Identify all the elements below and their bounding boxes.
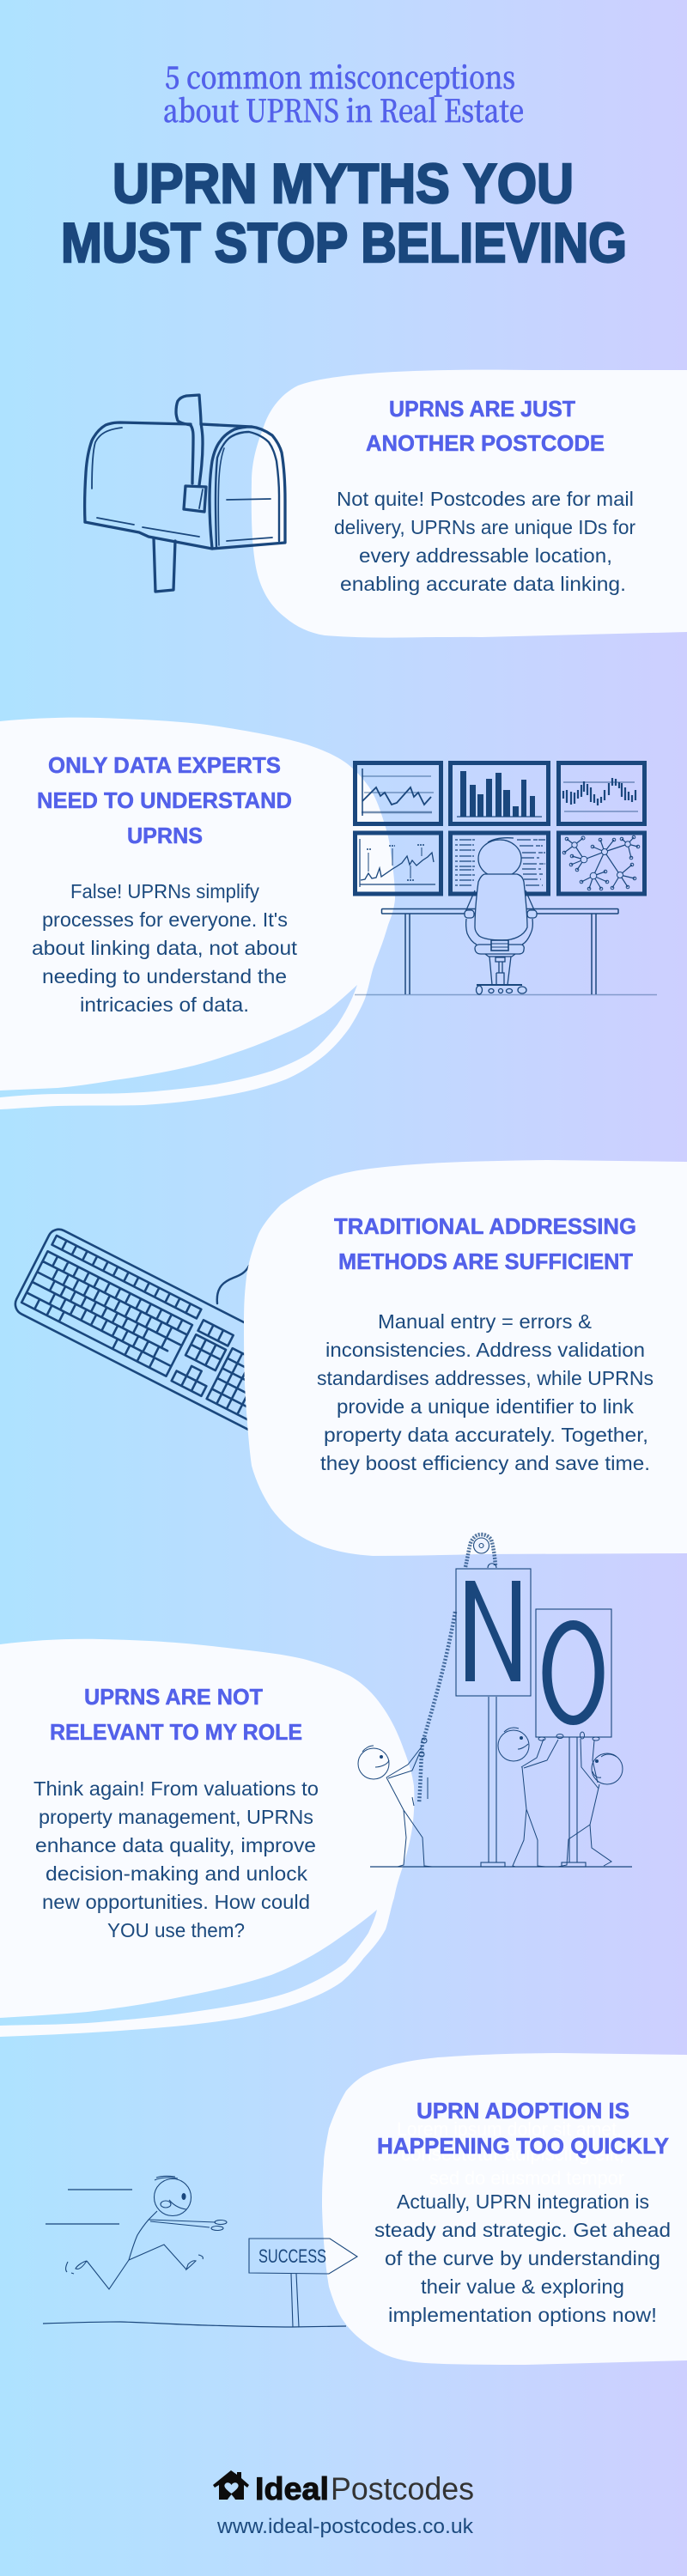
- chart: stock line monitor: [360, 839, 435, 887]
- text: myth 1 body: every addressable location,: [359, 544, 612, 567]
- icon: mailbox: [85, 395, 285, 592]
- text: myth 2 heading: NEED TO UNDERSTAND: [37, 787, 292, 813]
- text: myth 5 heading: HAPPENING TOO QUICKLY: [377, 2133, 669, 2159]
- keyboard cable: [217, 1266, 249, 1303]
- panel: myth 1 blob: [252, 370, 687, 638]
- faint leftover text behind myth 5: sed do eiusmod tempor: [429, 2167, 624, 2189]
- text: myth 5 body: [374, 2190, 671, 2326]
- text: myth 2 body: processes for everyone. It's: [42, 908, 288, 931]
- panel: myth 2 blob with tail: [0, 718, 395, 1109]
- illustration: running stick figure: [46, 2176, 227, 2289]
- ground line: [355, 994, 657, 996]
- text: myth 3 body: inconsistencies. Address validation: [325, 1339, 645, 1361]
- person in chair: [465, 838, 537, 994]
- ground line: [370, 1866, 632, 1868]
- text: myth 3 body: standardises addresses, while UPRNs: [317, 1367, 654, 1389]
- text: myth 1 body: Not quite! Postcodes are for mail: [337, 488, 634, 510]
- illustration: stick figures raising NO signs: [358, 1534, 632, 1867]
- logo: Ideal Postcodes: Ideal: [255, 2471, 329, 2506]
- text: myth 3 body: property data accurately. Together,: [324, 1424, 648, 1446]
- panel: myth 3 blob: [244, 1160, 687, 1556]
- monitor frames: [356, 762, 644, 894]
- logo: Ideal Postcodes: [213, 2470, 474, 2506]
- text: myth 2 body: about linking data, not about: [32, 937, 298, 959]
- stick figure lifting O right: [558, 1732, 623, 1867]
- text: myth 5 body: of the curve by understanding: [385, 2247, 660, 2269]
- text: myth 4 body: YOU use them?: [107, 1919, 245, 1941]
- text: myth 4 body: Think again! From valuations to: [33, 1777, 319, 1800]
- icon: house with heart: [213, 2470, 249, 2500]
- chart: line chart monitor: [362, 769, 434, 816]
- desk: [381, 908, 618, 994]
- text: myth 3 body: [317, 1310, 654, 1474]
- subtitle: 5 common misconceptions: [165, 54, 515, 98]
- faint leftover text behind myth 5: [397, 2118, 624, 2189]
- text: myth 1 body: delivery, UPRNs are unique IDs for: [334, 516, 635, 538]
- text: myth 1 heading: [366, 396, 605, 456]
- text: myth 5 body: Actually, UPRN integration is: [397, 2190, 649, 2213]
- signpost: success: SUCCESS: [258, 2245, 326, 2267]
- subtitle: about UPRNS in Real Estate: [163, 88, 524, 131]
- text: myth 2 body: [32, 880, 298, 1016]
- text: myth 1 heading: UPRNS ARE JUST: [389, 396, 575, 422]
- text: myth 3 heading: METHODS ARE SUFFICIENT: [338, 1249, 633, 1274]
- text: myth 4 body: property management, UPRNs: [39, 1806, 313, 1828]
- text: myth 3 body: provide a unique identifier to link: [337, 1395, 635, 1418]
- sign posts: [481, 1697, 586, 1867]
- text: myth 3 heading: [334, 1213, 636, 1274]
- text: myth 2 body: False! UPRNs simplify: [70, 880, 259, 902]
- text: myth 2 heading: ONLY DATA EXPERTS: [48, 752, 281, 778]
- logo: Ideal Postcodes: Postcodes: [331, 2471, 474, 2506]
- text: myth 3 body: Manual entry = errors &: [378, 1310, 592, 1333]
- text: myth 4 body: decision-making and unlock: [46, 1862, 308, 1885]
- chart: network monitor: [562, 835, 640, 890]
- text: myth 4 body: enhance data quality, improve: [35, 1834, 316, 1856]
- chart: list monitor: [455, 840, 545, 885]
- N sign: [456, 1569, 531, 1696]
- navigation keys: [185, 1320, 234, 1370]
- main key block: [21, 1251, 192, 1376]
- title: UPRN MYTHS YOU: [112, 152, 574, 215]
- text: myth 4 body: [33, 1777, 319, 1941]
- title: [61, 152, 627, 274]
- numeric keypad: [207, 1348, 283, 1425]
- website address: www.ideal-postcodes.co.uk: [216, 2515, 474, 2538]
- text: myth 4 body: new opportunities. How could: [42, 1891, 310, 1913]
- text: myth 2 heading: UPRNS: [127, 823, 203, 848]
- panel: myth 4 blob with tail: [0, 1639, 414, 2037]
- illustration: analyst at monitor wall: [355, 762, 657, 994]
- text: myth 1 heading: ANOTHER POSTCODE: [366, 430, 605, 456]
- text: myth 2 heading: [37, 752, 292, 848]
- text: myth 2 body: intricacies of data.: [80, 993, 249, 1016]
- arrow keys: [172, 1361, 211, 1396]
- ground line: [43, 2322, 346, 2327]
- text: myth 3 body: they boost efficiency and save time.: [320, 1452, 650, 1474]
- rope: [419, 1612, 455, 1803]
- text: myth 5 body: steady and strategic. Get ahead: [374, 2219, 671, 2241]
- text: myth 1 body: enabling accurate data linking.: [340, 573, 626, 595]
- text: myth 4 heading: RELEVANT TO MY ROLE: [50, 1719, 302, 1745]
- text: myth 4 heading: UPRNS ARE NOT: [84, 1684, 263, 1710]
- text: myth 2 body: needing to understand the: [42, 965, 287, 987]
- faint leftover text behind myth 5: Lorem ipsum dolor sit amet,: [397, 2118, 622, 2140]
- title: MUST STOP BELIEVING: [61, 211, 627, 274]
- signpost: success: [249, 2239, 357, 2327]
- text: myth 1 body: [334, 488, 635, 595]
- text: myth 4 heading: [50, 1684, 302, 1745]
- text: myth 3 heading: TRADITIONAL ADDRESSING: [334, 1213, 636, 1239]
- text: myth 5 body: their value & exploring: [421, 2275, 624, 2298]
- text: myth 5 heading: UPRN ADOPTION IS: [416, 2098, 629, 2123]
- stick figure lifting O left: [498, 1728, 563, 1867]
- faint leftover text behind myth 5: consectetur adipiscing elit,: [401, 2143, 624, 2165]
- chart: candlestick monitor: [563, 778, 638, 811]
- subtitle: [163, 54, 524, 131]
- text: myth 5 heading: [377, 2098, 669, 2159]
- stick figure pulling rope: [358, 1738, 432, 1867]
- panel: myth 5 blob: [322, 2053, 687, 2365]
- text: myth 5 body: implementation options now!: [388, 2304, 657, 2326]
- chart: bar chart monitor: [457, 771, 542, 817]
- O sign: [536, 1609, 611, 1737]
- icon: computer keyboard: [11, 1225, 301, 1435]
- function key row: [52, 1236, 201, 1318]
- pulley: [465, 1534, 496, 1568]
